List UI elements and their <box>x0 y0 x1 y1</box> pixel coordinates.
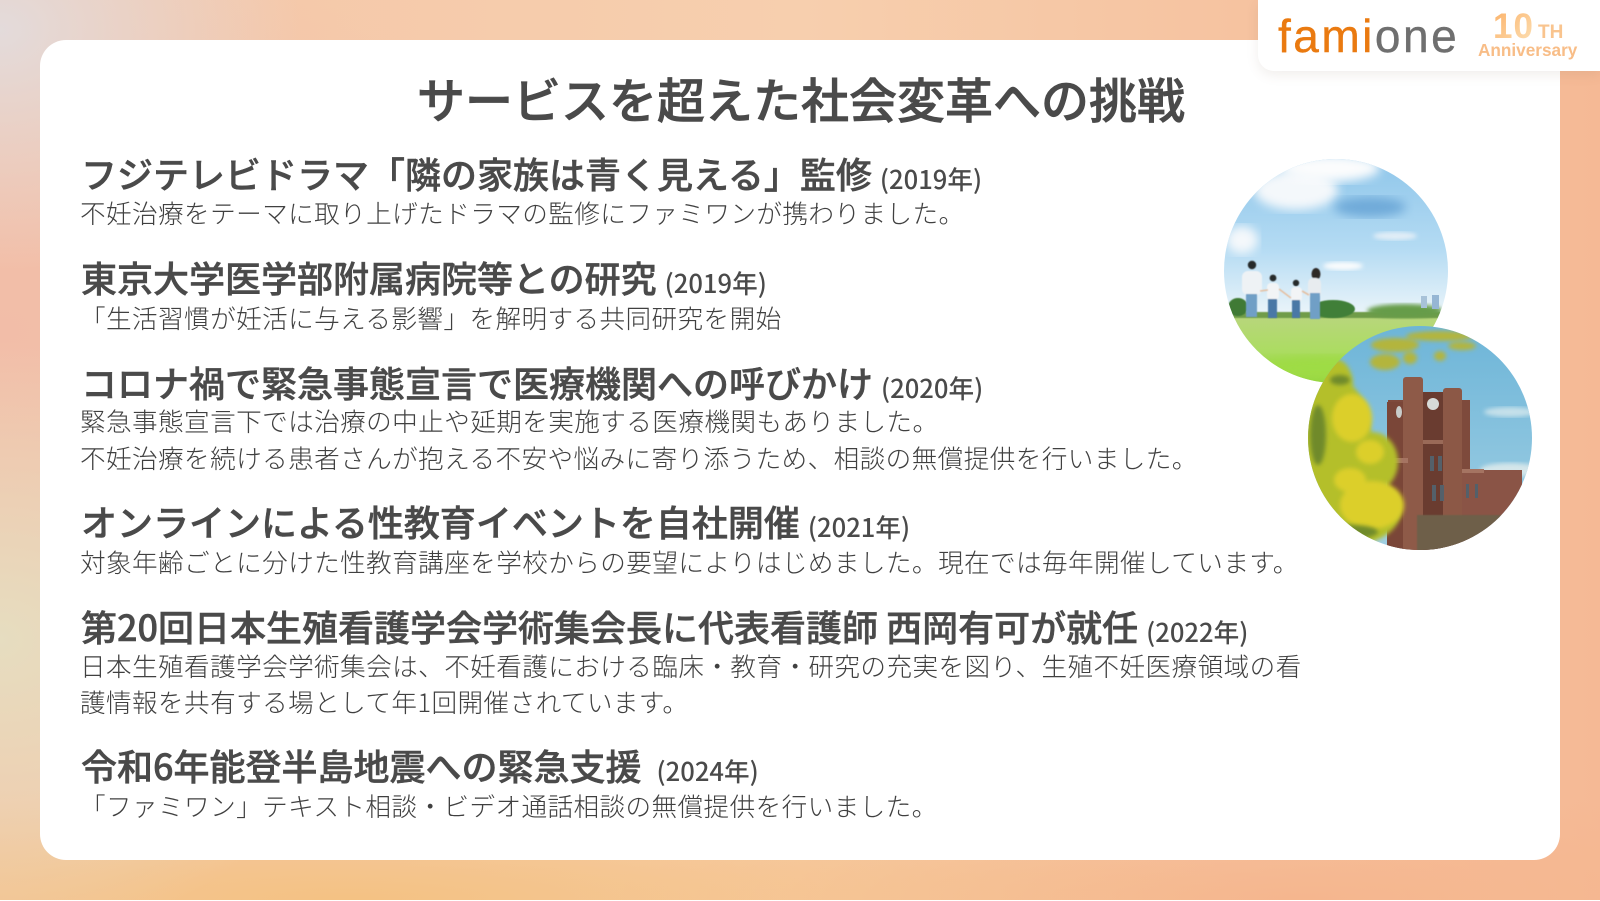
item 2 description: 「生活習慣が妊活に与える影響」を解明する共同研究を開始 <box>80 299 782 336</box>
item 5 heading: 第20回日本生殖看護学会学術集会長に代表看護師 西岡有可が就任 (2022年) <box>81 600 1248 652</box>
item 3 heading: コロナ禍で緊急事態宣言で医療機関への呼びかけ (2020年) <box>81 356 983 408</box>
photos: family and university <box>1224 159 1532 550</box>
photo: university clock tower <box>1308 326 1532 550</box>
10th anniversary badge: Anniversary <box>1478 40 1578 60</box>
10th anniversary badge: 10 <box>1493 7 1534 46</box>
item 6 heading: 令和6年能登半島地震への緊急支援 (2024年) <box>81 739 759 791</box>
item 3 description line 2: 不妊治療を続ける患者さんが抱える不安や悩みに寄り添うため、相談の無償提供を行いました。 <box>80 439 1198 476</box>
item 3 description line 1: 緊急事態宣言下では治療の中止や延期を実施する医療機関もありました。 <box>80 402 938 439</box>
photo: family in field <box>1224 154 1448 385</box>
item 1 description: 不妊治療をテーマに取り上げたドラマの監修にファミワンが携わりました。 <box>80 194 964 231</box>
item 5 description line 1: 日本生殖看護学会学術集会は、不妊看護における臨床・教育・研究の充実を図り、生殖不妊医療領域の看 <box>80 647 1302 684</box>
logo: famione 10th anniversary <box>1278 7 1578 62</box>
item 5 description line 2: 護情報を共有する場として年1回開催されています。 <box>80 683 688 720</box>
title: サービスを超えた社会変革への挑戦 <box>417 62 1185 132</box>
item 4 heading: オンラインによる性教育イベントを自社開催 (2021年) <box>81 495 910 547</box>
item 4 description: 対象年齢ごとに分けた性教育講座を学校からの要望によりはじめました。現在では毎年開催しています。 <box>80 543 1299 580</box>
logo panel <box>1258 0 1600 71</box>
10th anniversary badge <box>1478 7 1578 60</box>
item 2 heading: 東京大学医学部附属病院等との研究 (2019年) <box>81 251 767 303</box>
item 6 description: 「ファミワン」テキスト相談・ビデオ通話相談の無償提供を行いました。 <box>80 787 938 824</box>
10th anniversary badge: TH <box>1538 22 1563 43</box>
logo wordmark: famione <box>1278 10 1459 62</box>
item 1 heading: フジテレビドラマ「隣の家族は青く見える」監修 (2019年) <box>81 147 982 199</box>
